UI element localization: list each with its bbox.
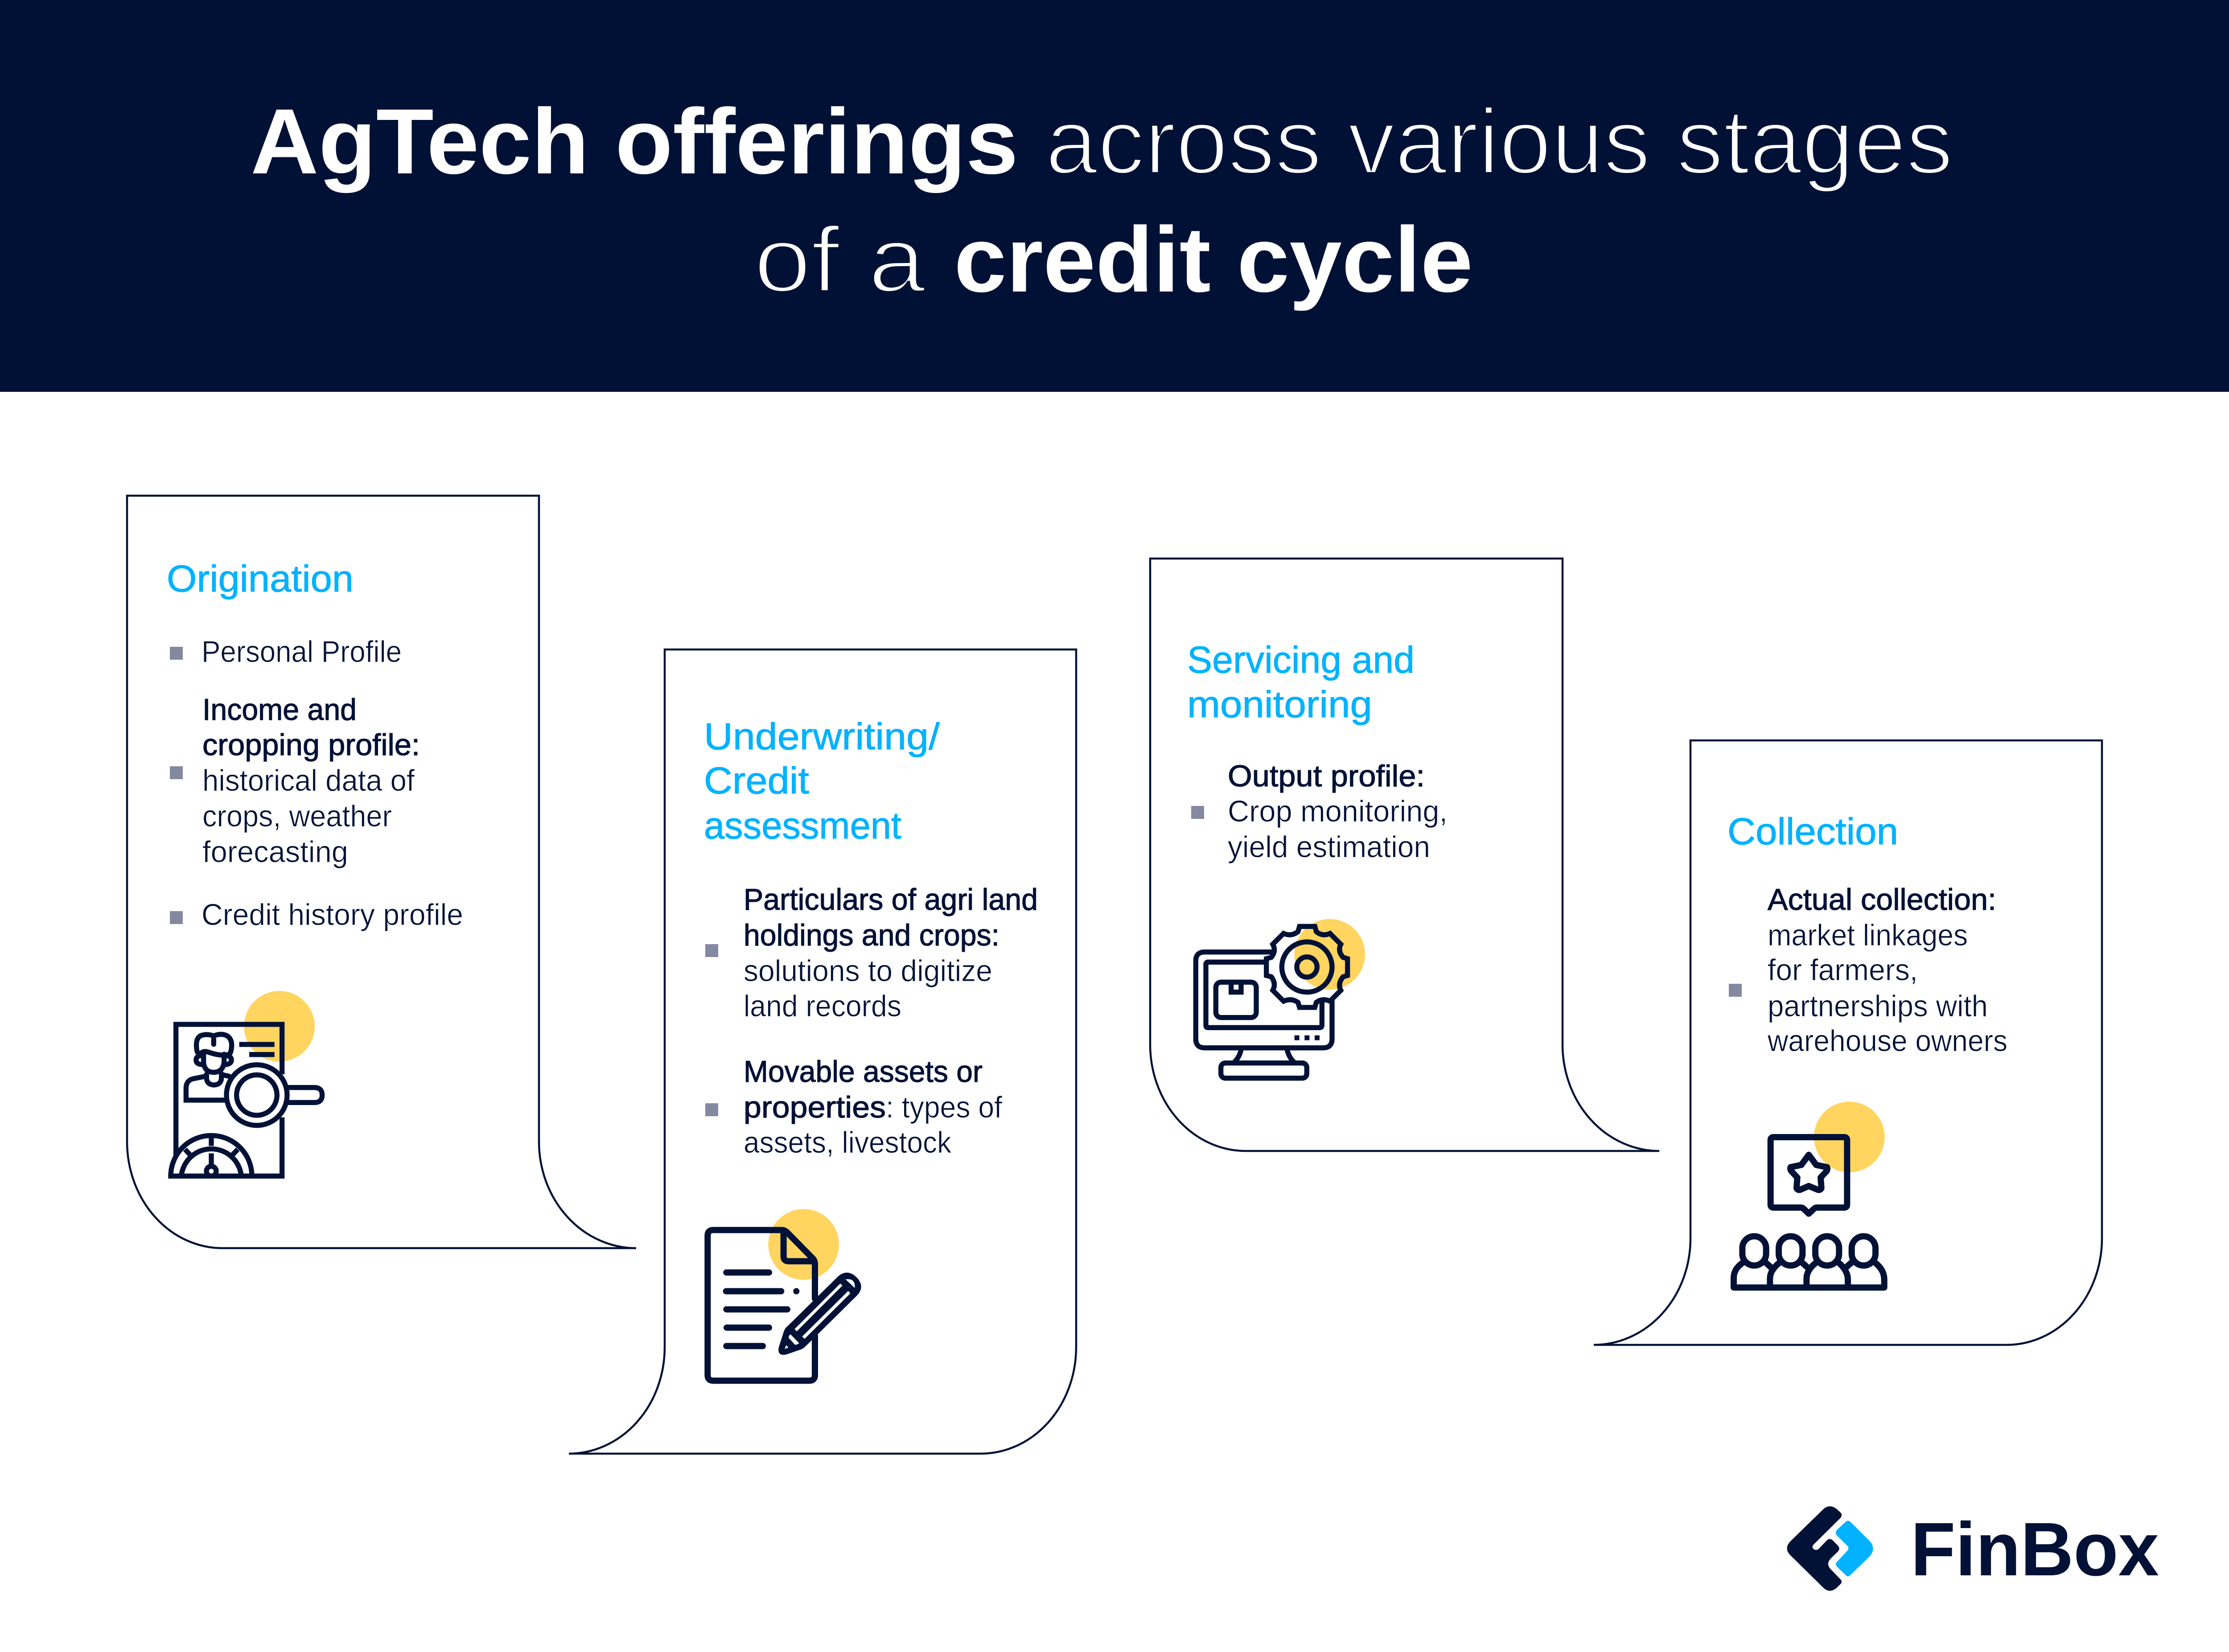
heading: collection: Collection <box>1727 810 1898 852</box>
bullet list: collection <box>1729 883 2007 1058</box>
icon: star speech bubble over group of people <box>1734 1101 1885 1287</box>
bullet list: origination: cropping profile: <box>202 728 420 762</box>
bullet list: origination: crops, weather <box>202 799 392 833</box>
bullet list: underwriting: assets, livestock <box>744 1126 952 1159</box>
panel: collection <box>1594 740 2102 1345</box>
bullet list: origination <box>170 635 463 932</box>
icon: profile under magnifier with gauge <box>168 991 322 1176</box>
bullet list: underwriting: properties <box>744 1090 886 1124</box>
title <box>251 90 1953 312</box>
title: AgTech offerings <box>251 90 1018 193</box>
title: of a <box>754 208 925 312</box>
panel: underwriting / credit assessment <box>569 649 1076 1454</box>
title: across various stages <box>1045 90 1953 193</box>
bullet list: servicing <box>1191 759 1448 864</box>
bullet list: underwriting: Movable assets or <box>744 1055 983 1089</box>
heading: servicing and monitoring: monitoring <box>1187 683 1372 725</box>
bullet list: servicing: Output profile: <box>1228 759 1425 793</box>
heading: underwriting: assessment <box>704 805 901 847</box>
bullet list: underwriting: solutions to digitize <box>744 954 992 988</box>
heading: origination: Origination <box>167 558 354 600</box>
icon: document and pencil <box>707 1209 861 1381</box>
bullet list: origination: historical data of <box>202 764 415 797</box>
bullet list: origination: forecasting <box>202 835 348 869</box>
bullet list: underwriting: land records <box>744 989 901 1023</box>
logo wordmark: FinBox <box>1911 1507 2159 1592</box>
bullet list: underwriting: : types of <box>886 1090 1002 1124</box>
panel: servicing and monitoring <box>1150 559 1659 1151</box>
bullet list: underwriting: Particulars of agri land <box>744 883 1038 916</box>
panel: origination <box>127 496 636 1248</box>
bullet list: underwriting: holdings and crops: <box>744 918 999 952</box>
header band with title <box>0 0 2229 392</box>
bullet list: collection: warehouse owners <box>1767 1024 2007 1058</box>
heading: servicing and monitoring: Servicing and <box>1187 639 1415 681</box>
bullet list: origination: Personal Profile <box>202 635 402 669</box>
heading: underwriting: Underwriting/ <box>704 715 940 757</box>
bullet list: collection: market linkages <box>1768 918 1968 952</box>
bullet list: servicing: Crop monitoring, <box>1228 794 1448 828</box>
bullet list: collection: Actual collection: <box>1768 883 1996 916</box>
bullet list: collection: partnerships with <box>1768 989 1988 1023</box>
heading: underwriting <box>704 715 940 847</box>
bullet list: underwriting <box>705 883 1038 1159</box>
heading: underwriting: Credit <box>704 760 809 801</box>
bullet list: origination: Income and <box>202 693 357 727</box>
bullet list: origination: Credit history profile <box>202 898 463 932</box>
heading: servicing and monitoring <box>1187 639 1415 725</box>
logo mark <box>1787 1506 1873 1591</box>
title: credit cycle <box>954 208 1473 312</box>
bullet list: servicing: yield estimation <box>1228 830 1430 864</box>
bullet list: collection: for farmers, <box>1768 953 1918 987</box>
logo: FinBox <box>1787 1506 2159 1592</box>
icon: monitor with gear <box>1196 919 1365 1078</box>
